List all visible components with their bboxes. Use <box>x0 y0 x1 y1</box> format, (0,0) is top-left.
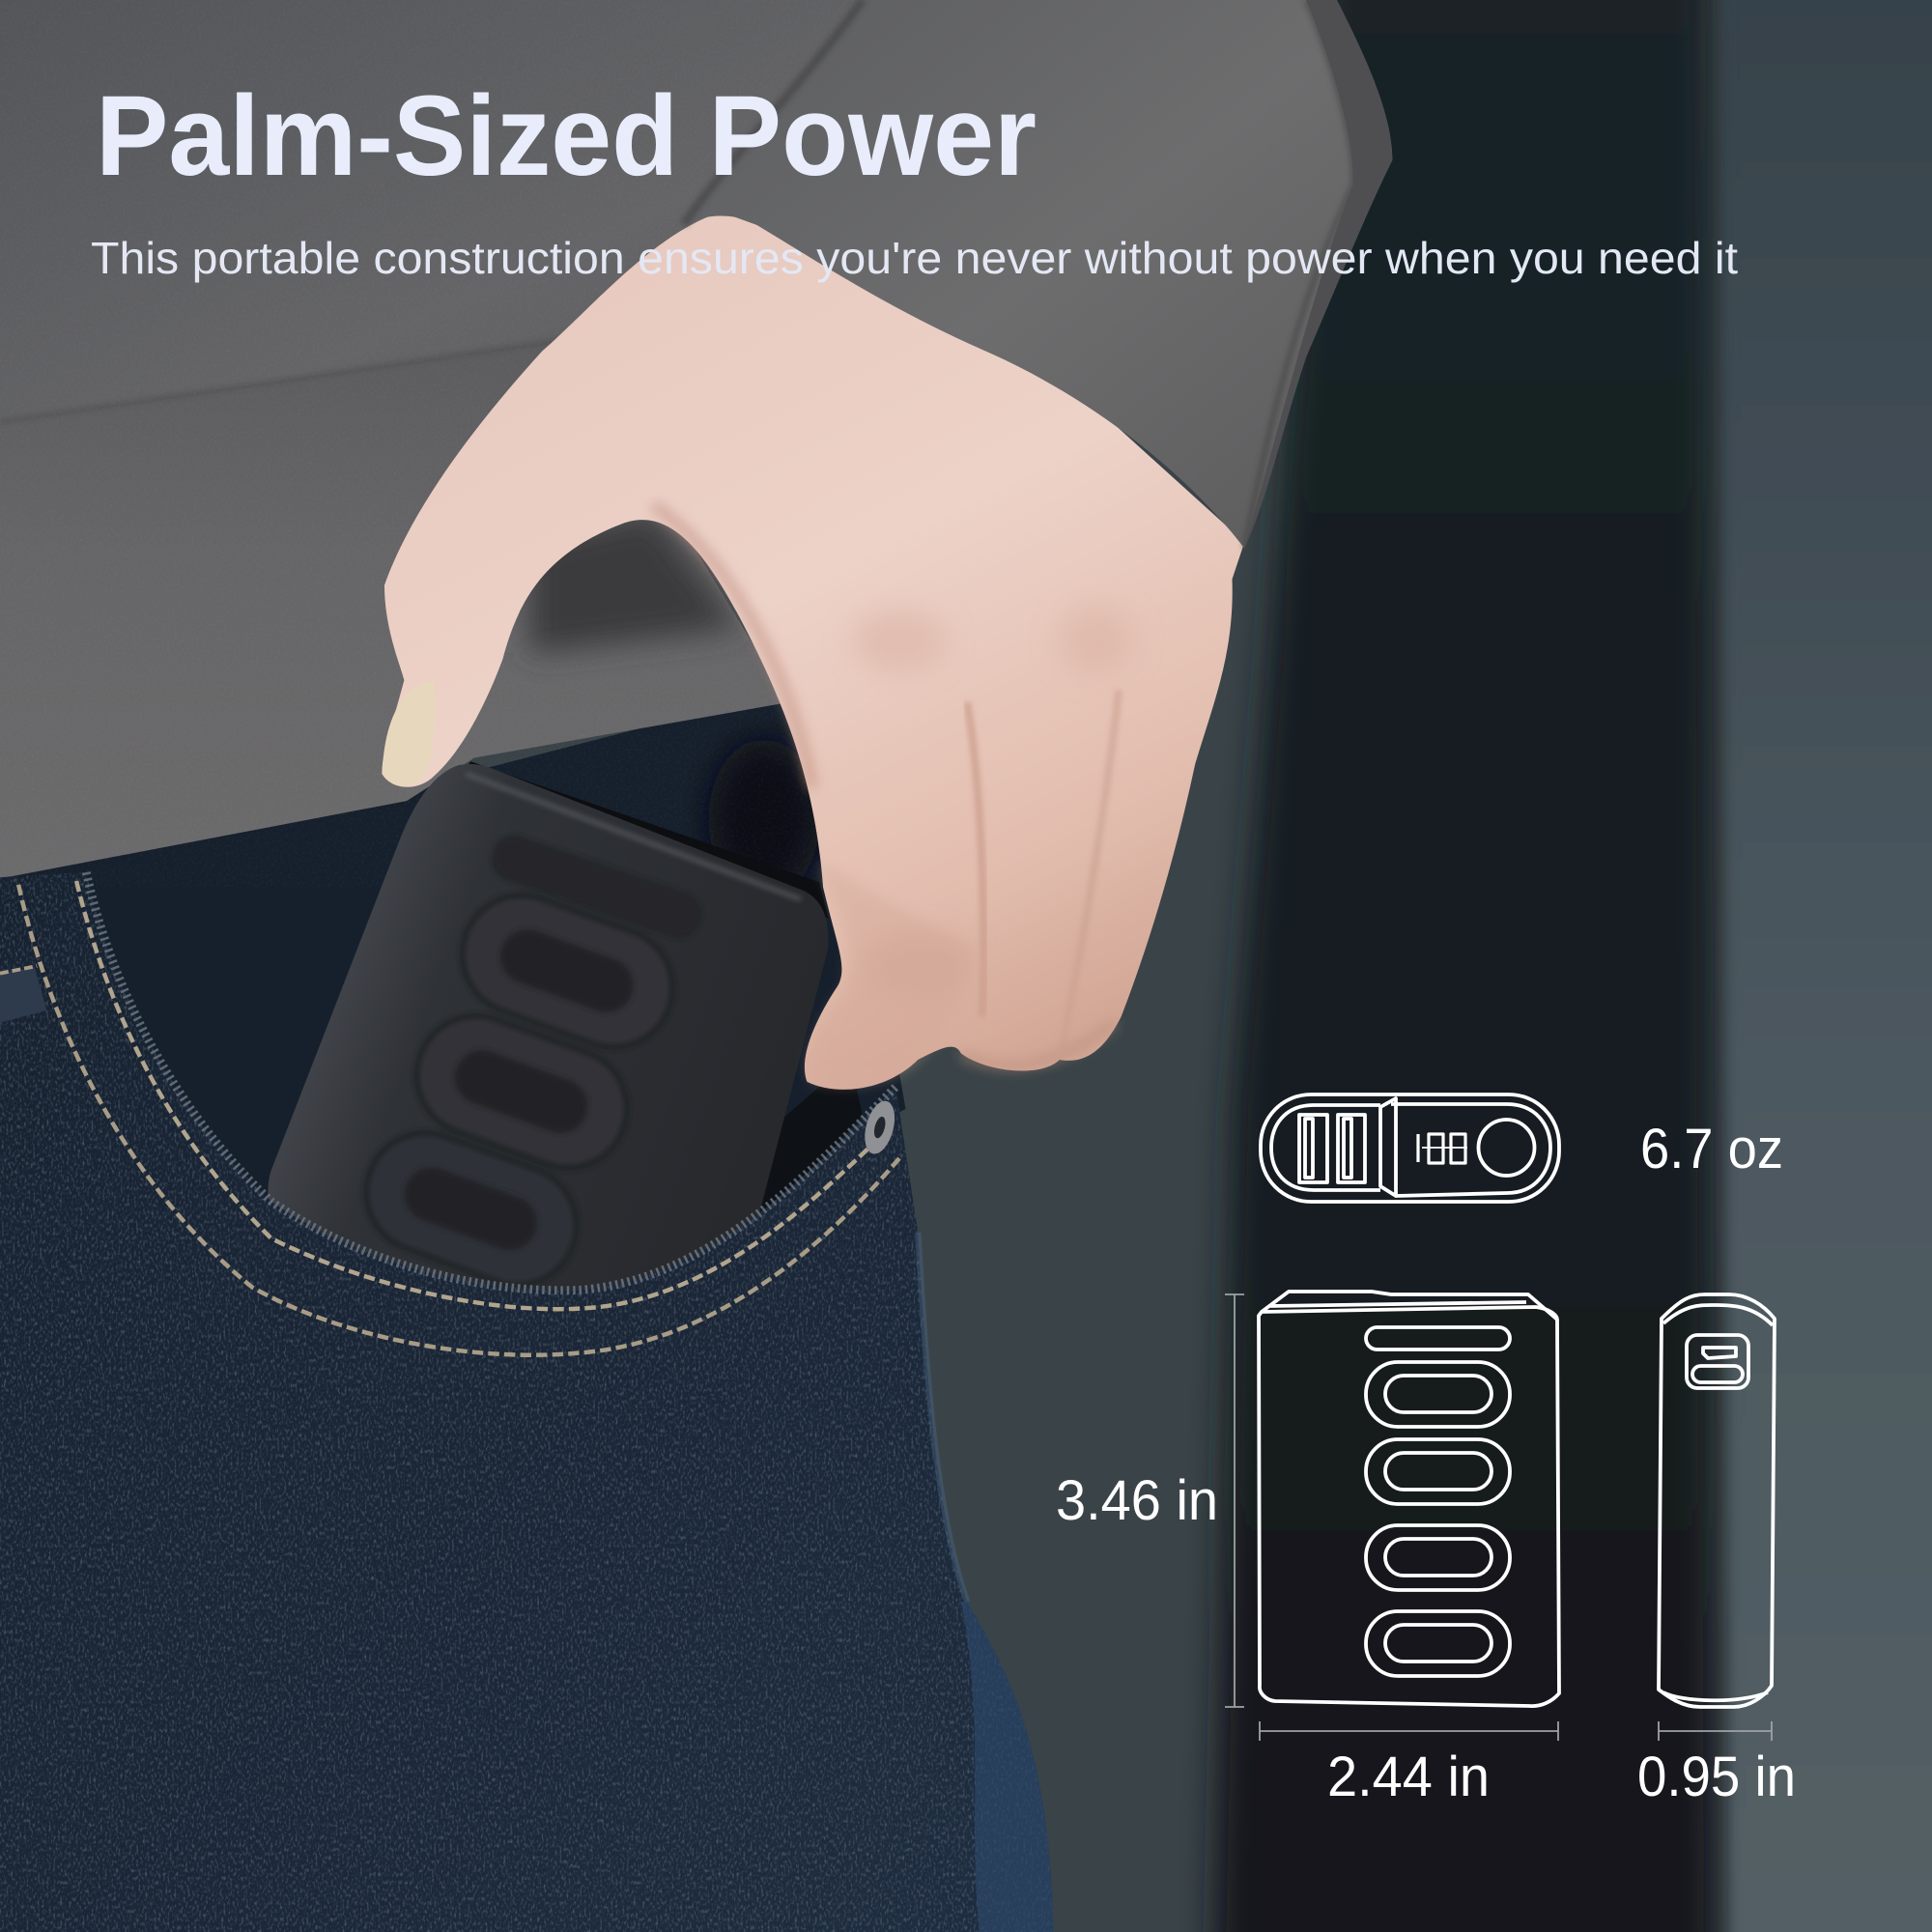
height label: 3.46 in <box>1056 1469 1218 1532</box>
line art: front view of power bank <box>1259 1292 1559 1706</box>
embossed bar <box>1366 1327 1510 1350</box>
width label: 2.44 in <box>1327 1746 1490 1808</box>
embossed rings <box>1366 1362 1510 1427</box>
belt loop <box>0 967 46 1023</box>
subtitle: This portable construction ensures you're never without power when you need it <box>91 233 1738 283</box>
raised bar <box>492 835 699 937</box>
jeans front with pocket <box>0 863 1060 1932</box>
hand <box>382 212 1244 1090</box>
weight label: 6.7 oz <box>1640 1118 1783 1180</box>
thumb nail <box>382 680 435 785</box>
title: Palm-Sized Power <box>96 72 1037 200</box>
sweater cuff <box>684 0 1392 549</box>
dimension lines <box>1225 1294 1772 1741</box>
power bank <box>268 761 829 1301</box>
raised rings <box>459 892 674 1049</box>
line art: top view of power bank <box>1261 1094 1559 1202</box>
finger shading <box>967 702 983 1016</box>
sweater torso <box>0 0 936 887</box>
rivet <box>860 1097 900 1157</box>
jeans back <box>11 703 906 1212</box>
USB-C port <box>1687 1335 1748 1388</box>
depth label: 0.95 in <box>1637 1746 1796 1808</box>
pocket stitching <box>76 881 877 1309</box>
line art: side view of power bank <box>1659 1294 1775 1707</box>
battery display <box>1418 1134 1467 1163</box>
